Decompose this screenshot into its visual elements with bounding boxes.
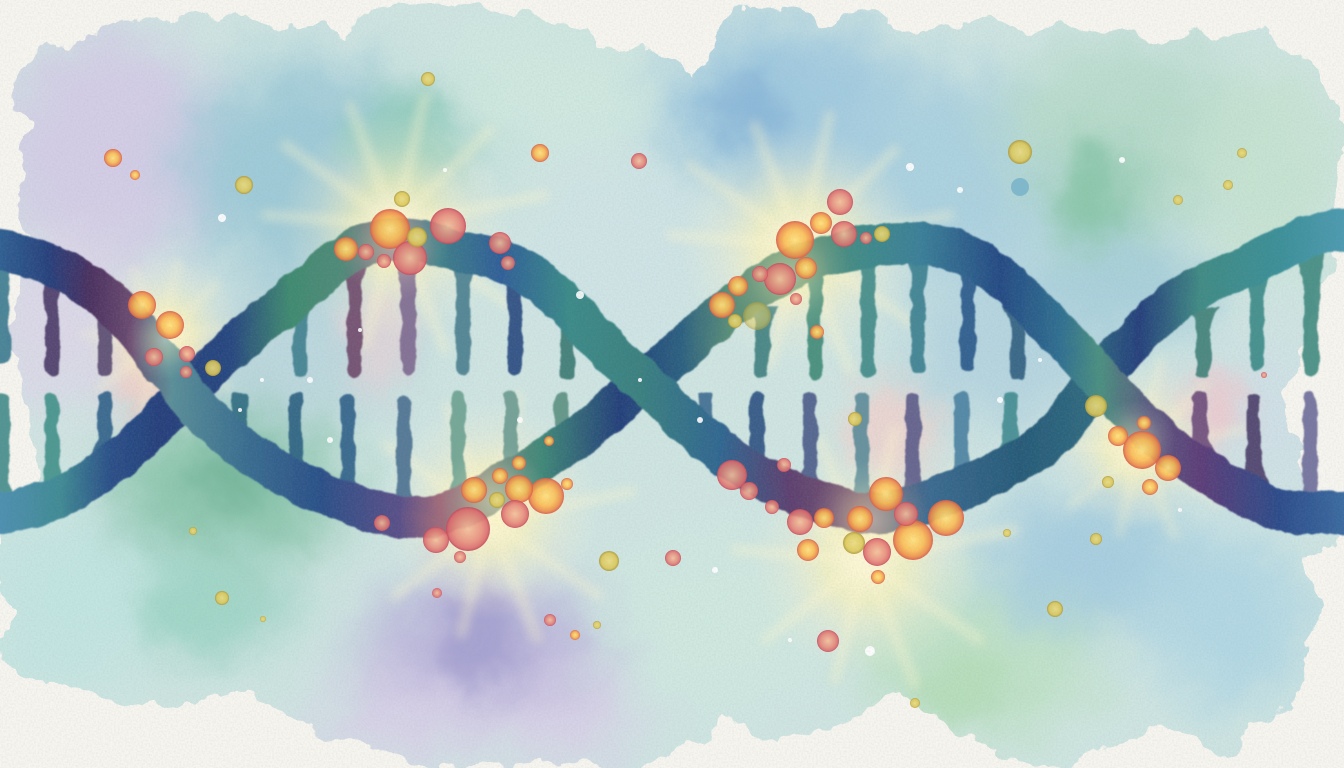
cluster: lower left <box>374 436 573 563</box>
cluster: upper centre <box>709 189 890 339</box>
white sparkle specks <box>218 157 1182 656</box>
cluster: lower centre <box>717 458 964 652</box>
light wash over the helix at each burst <box>125 190 1175 580</box>
cluster: right crossing <box>1085 395 1181 495</box>
scattered droplets <box>104 72 1267 708</box>
DNA helix <box>0 229 1344 524</box>
strand: starts lower left <box>0 229 1344 515</box>
rungs: lower half <box>0 392 1327 524</box>
bubble clusters <box>128 189 1181 652</box>
rungs: upper half <box>0 240 1328 380</box>
darker wash accents <box>110 80 1245 725</box>
strand: starts upper left <box>0 243 1344 517</box>
cluster: left crossing <box>128 291 221 378</box>
cluster: upper left <box>334 191 515 275</box>
light bursts behind the helix <box>82 95 1245 685</box>
strand overlap at centre crossing <box>480 255 800 495</box>
